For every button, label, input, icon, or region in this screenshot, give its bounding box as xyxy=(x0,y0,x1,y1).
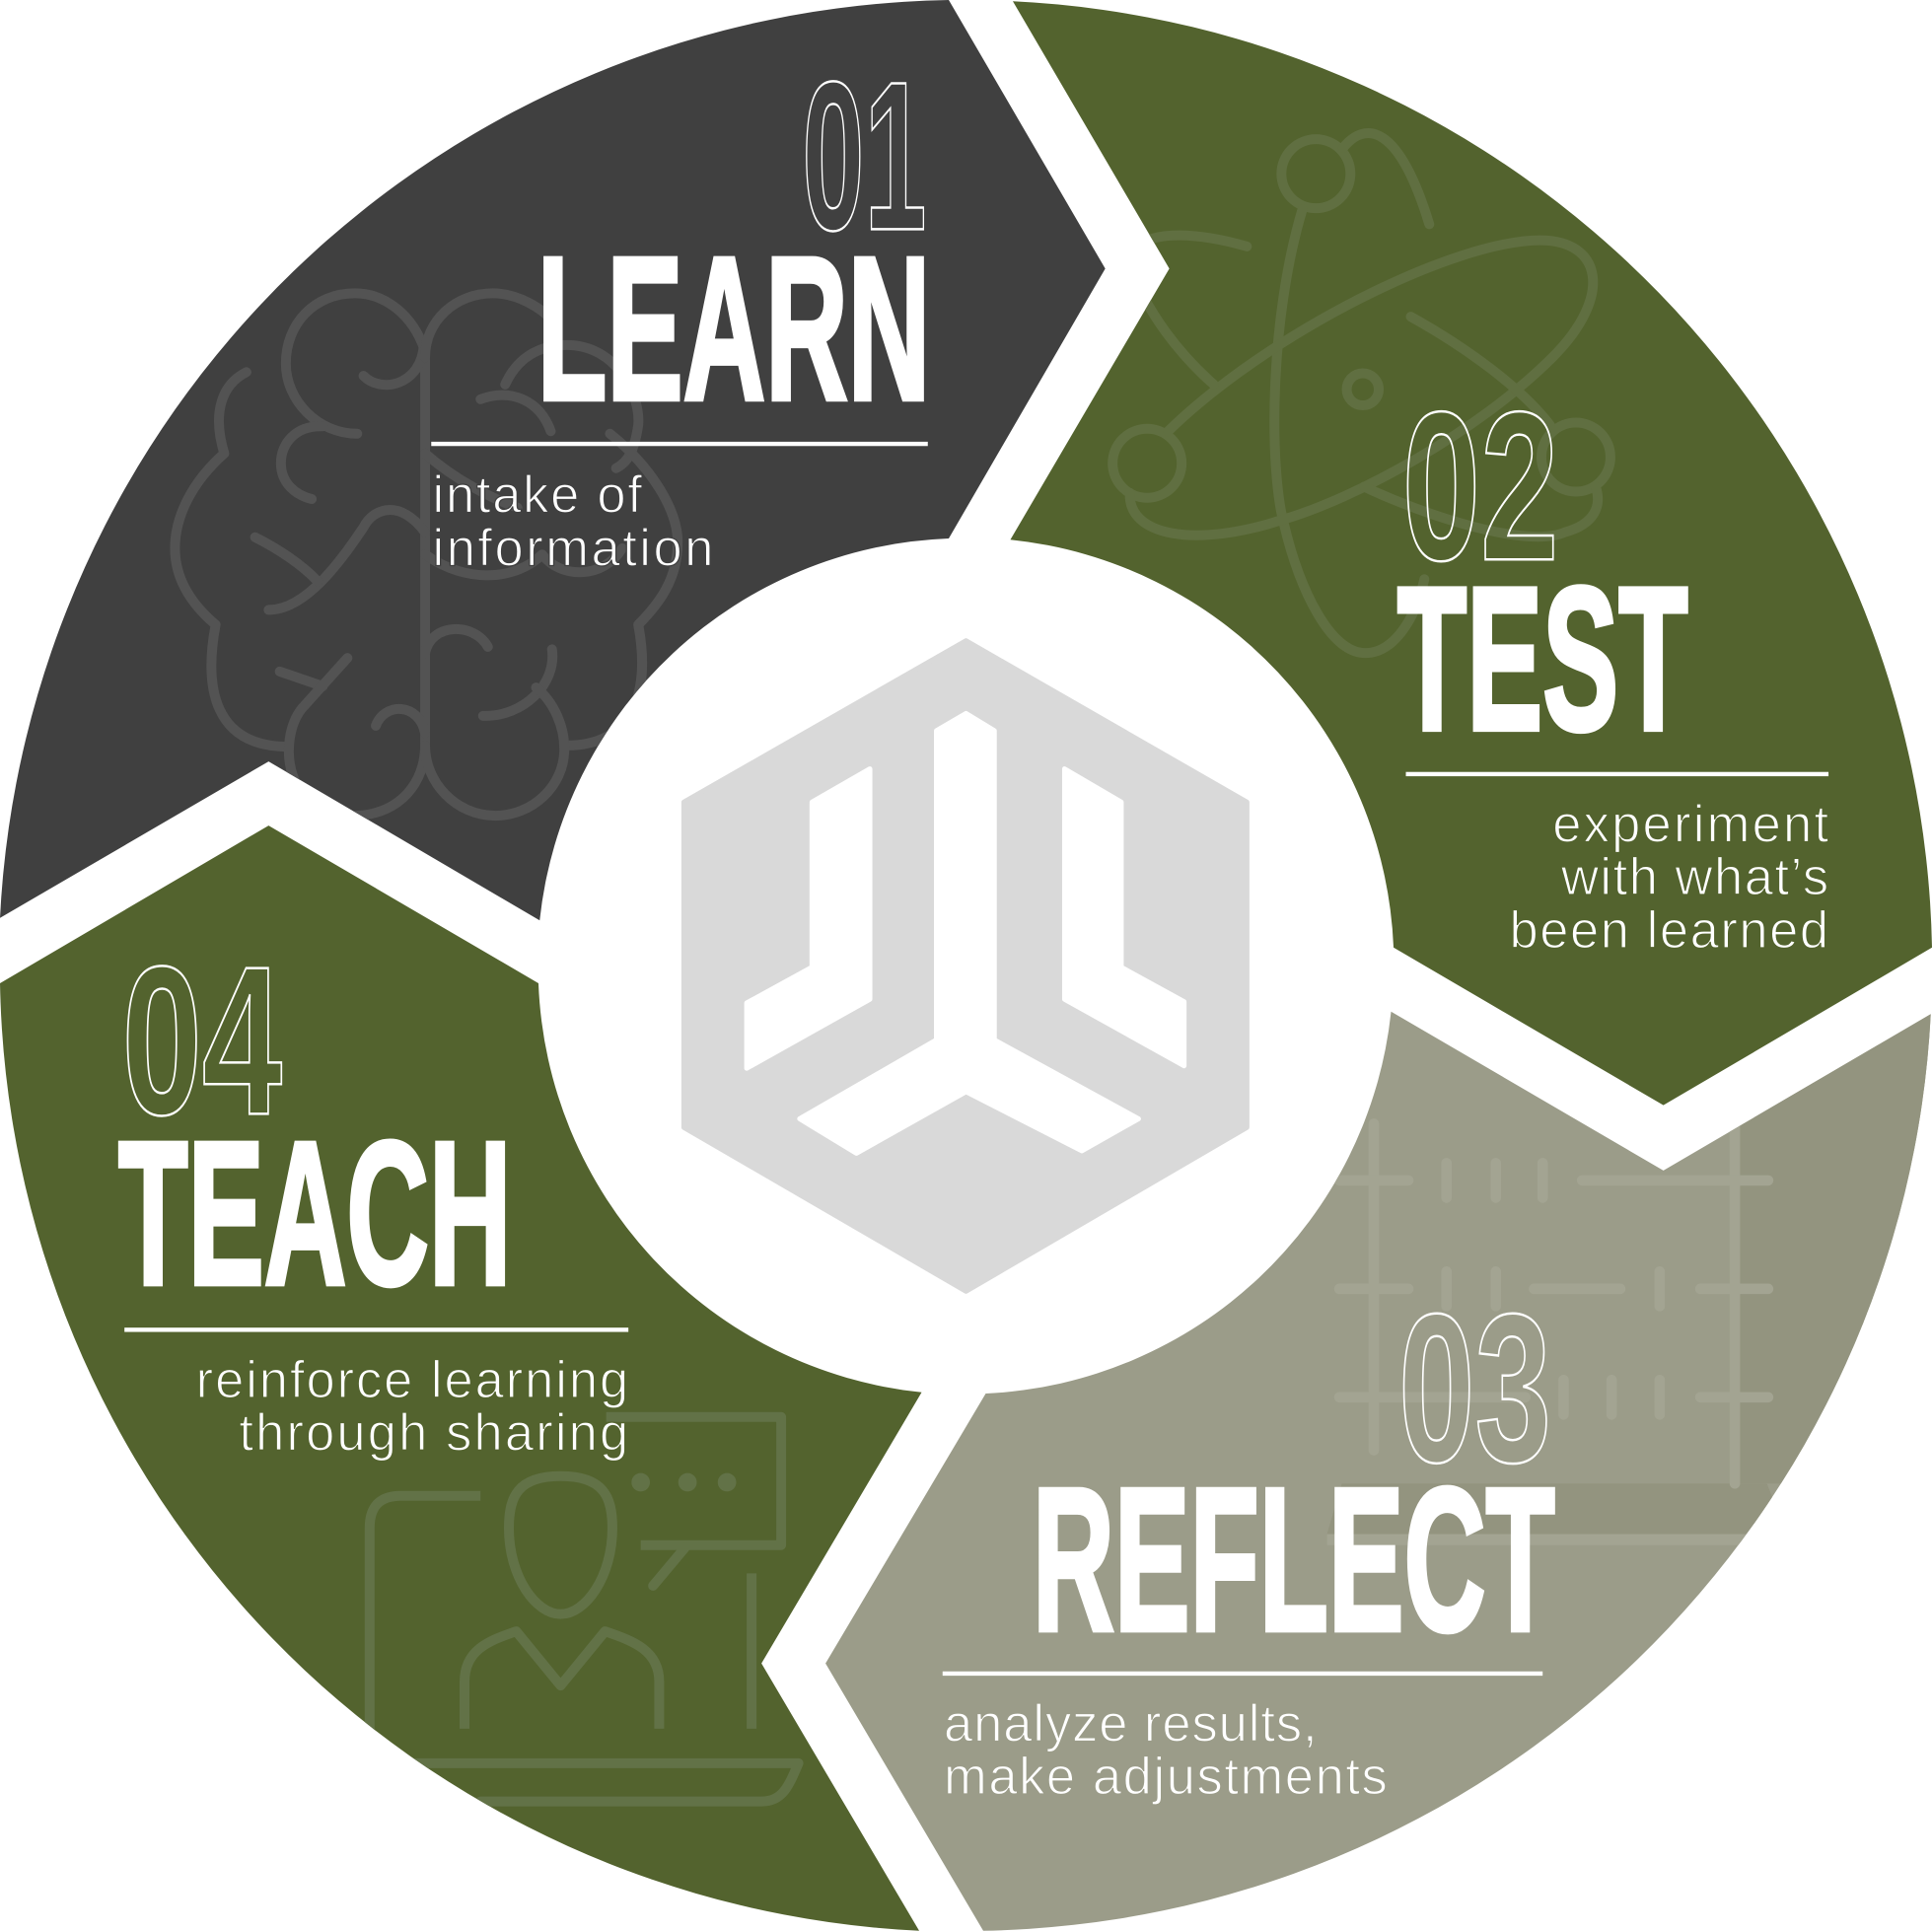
description: test: been learned xyxy=(1509,902,1828,960)
heading: learn: LEARN xyxy=(537,214,930,443)
divider xyxy=(1406,772,1828,776)
description: teach: through sharing xyxy=(239,1404,628,1462)
panel: 02 test xyxy=(1010,1,1932,1106)
segment shape: test xyxy=(1010,1,1932,1106)
icon: atom xyxy=(1112,133,1610,653)
heading: teach: TEACH xyxy=(118,1099,511,1327)
divider xyxy=(431,442,928,446)
description: teach xyxy=(196,1352,628,1462)
segment shape: reflect xyxy=(825,1012,1931,1931)
center logo: hexagon cube xyxy=(683,641,1247,1291)
description: learn xyxy=(433,467,713,577)
heading: test: TEST xyxy=(1397,544,1688,773)
description: learn: information xyxy=(433,520,713,577)
segment shape: teach xyxy=(0,825,922,1931)
description: test: experiment xyxy=(1552,796,1828,853)
panel: 01 learn xyxy=(0,0,1106,920)
panel: 03 reflect xyxy=(825,1010,1932,1931)
description: teach: reinforce learning xyxy=(196,1352,628,1409)
description: test: with what’s xyxy=(1560,849,1828,906)
icon: monitor with code xyxy=(1327,1010,1932,1545)
description: learn: intake of xyxy=(433,467,642,525)
segment shape: learn xyxy=(0,0,1106,920)
step number 01: 01 xyxy=(802,36,927,274)
step number 04: 04 xyxy=(122,921,282,1159)
description: reflect: make adjustments xyxy=(944,1749,1388,1806)
panel: 04 teach xyxy=(0,825,922,1931)
divider xyxy=(943,1672,1542,1676)
icon: brain xyxy=(175,293,678,816)
description: test xyxy=(1509,796,1828,960)
description: reflect xyxy=(944,1695,1388,1806)
step number 03: 03 xyxy=(1398,1269,1551,1507)
icon: teacher at laptop with speech bubble xyxy=(370,1417,799,1802)
step number 02: 02 xyxy=(1402,367,1558,605)
divider xyxy=(124,1327,628,1332)
description: reflect: analyze results, xyxy=(944,1695,1318,1753)
